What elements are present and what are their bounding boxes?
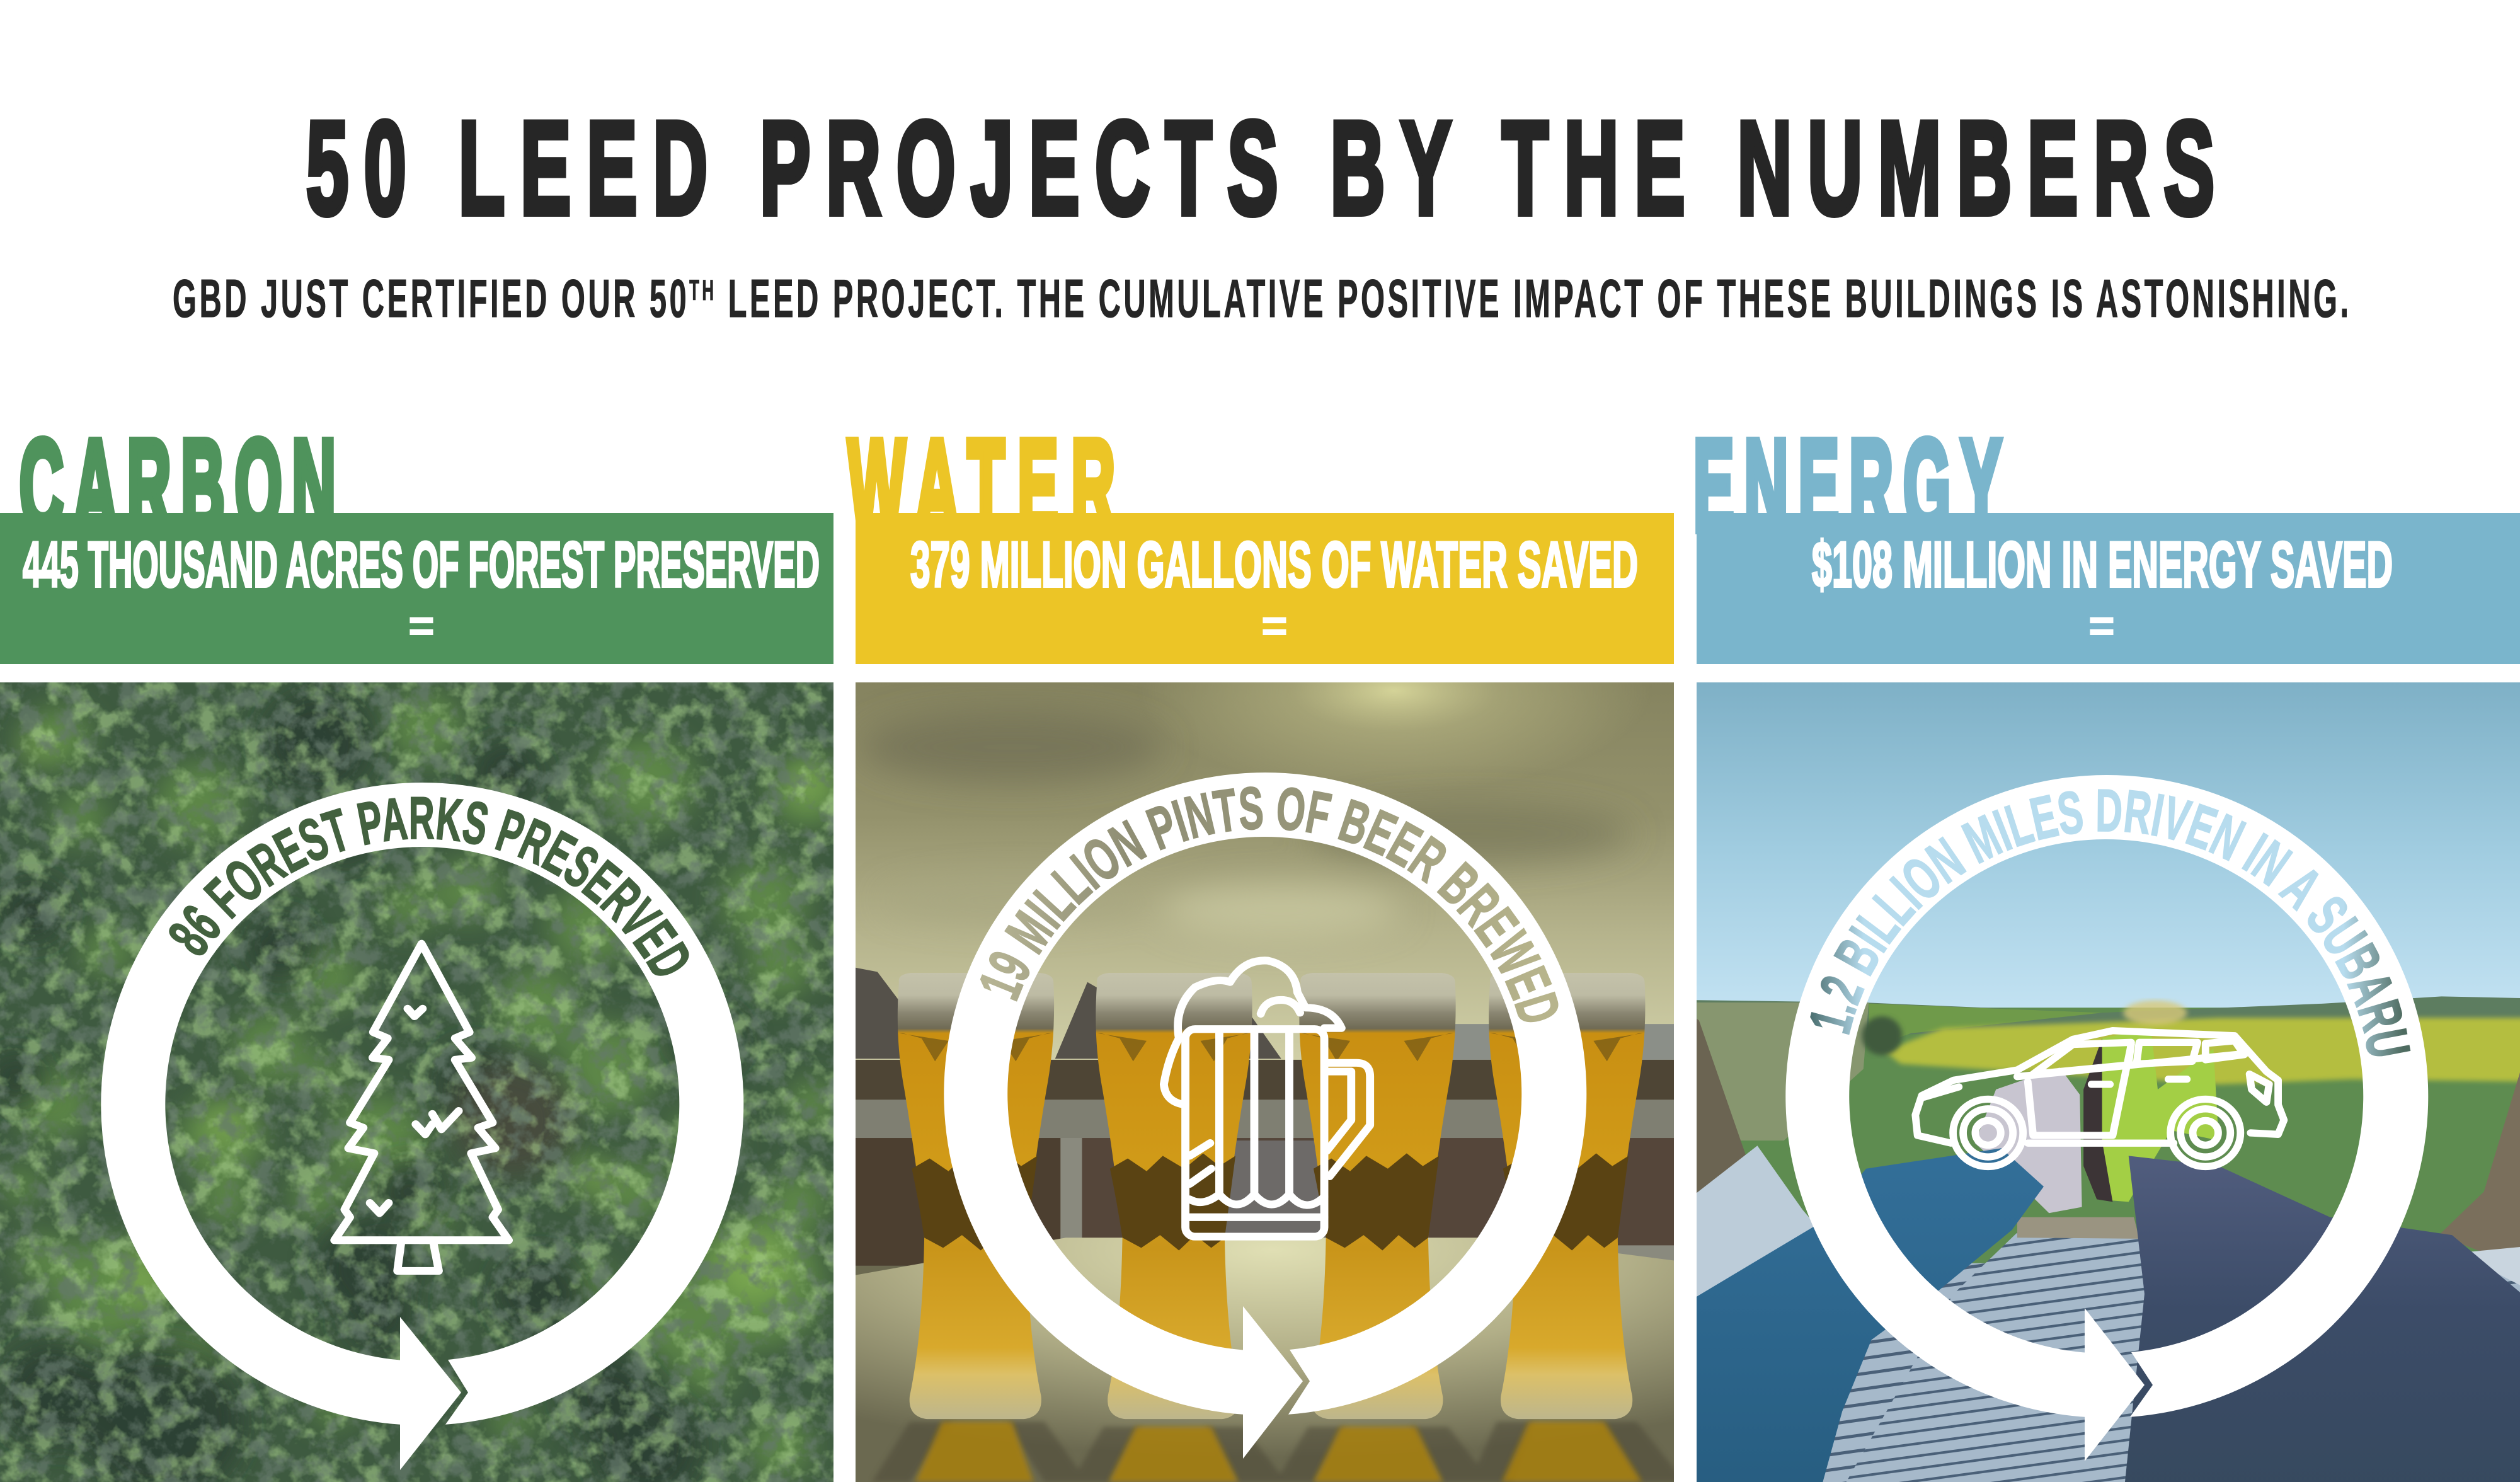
equals sign: = <box>409 601 434 650</box>
circular arrow <box>101 783 743 1470</box>
ring text: 86 FOREST PARKS PRESERVED <box>169 796 689 976</box>
panel: energy banner <box>1697 513 2520 664</box>
ring: forest parks <box>101 783 743 1470</box>
table <box>856 1238 1674 1447</box>
mountains <box>850 967 1281 1059</box>
ring: pints of beer <box>944 773 1586 1459</box>
yellow field <box>1884 1018 2520 1084</box>
ring: miles driven <box>1785 775 2428 1461</box>
subtitle: LEED PROJECT. THE CUMULATIVE POSITIVE IMPACT OF THESE BUILDINGS IS ASTONISHING. <box>717 268 2349 328</box>
navy trousers <box>2123 1156 2520 1482</box>
striped shirt <box>1837 1232 2155 1482</box>
panel: beer photo <box>856 682 1674 1482</box>
heading: carbon: CARBON <box>20 413 336 558</box>
carbon statistic: 445 THOUSAND ACRES OF FOREST PRESERVED <box>23 529 820 600</box>
ring text: 1.2 BILLION MILES DRIVEN IN A SUBARU <box>1810 789 2410 1056</box>
subtitle: TH <box>689 275 714 306</box>
beer glasses <box>898 973 1054 1419</box>
jeans <box>1688 1148 2044 1482</box>
shoes <box>2083 1028 2219 1202</box>
car pillars <box>1688 1013 1748 1199</box>
heading: water: WATER <box>848 413 1115 558</box>
circular arrow <box>944 773 1586 1459</box>
panel: road trip photo <box>1688 681 2520 1482</box>
panel: water banner <box>856 513 1674 664</box>
title: 50 LEED PROJECTS BY THE NUMBERS <box>306 95 2214 242</box>
icon: car <box>1915 1031 2284 1166</box>
water statistic: 379 MILLION GALLONS OF WATER SAVED <box>910 529 1638 600</box>
subtitle: GBD JUST CERTIFIED OUR 50 <box>173 268 687 328</box>
ring text: 19 MILLION PINTS OF BEER BREWED <box>980 786 1559 1022</box>
circular arrow <box>1785 775 2428 1461</box>
far hills <box>1688 996 2520 1038</box>
bedding <box>1688 1146 1826 1314</box>
equals sign: = <box>1262 601 1287 650</box>
icon: beer mug <box>1164 960 1370 1237</box>
icon: pine tree <box>335 944 509 1271</box>
panel: forest photo <box>0 682 845 1482</box>
panel: carbon banner <box>0 513 833 664</box>
heading: energy: ENERGY <box>1693 413 2002 558</box>
equals sign: = <box>2089 601 2114 650</box>
railing <box>850 1060 1695 1101</box>
